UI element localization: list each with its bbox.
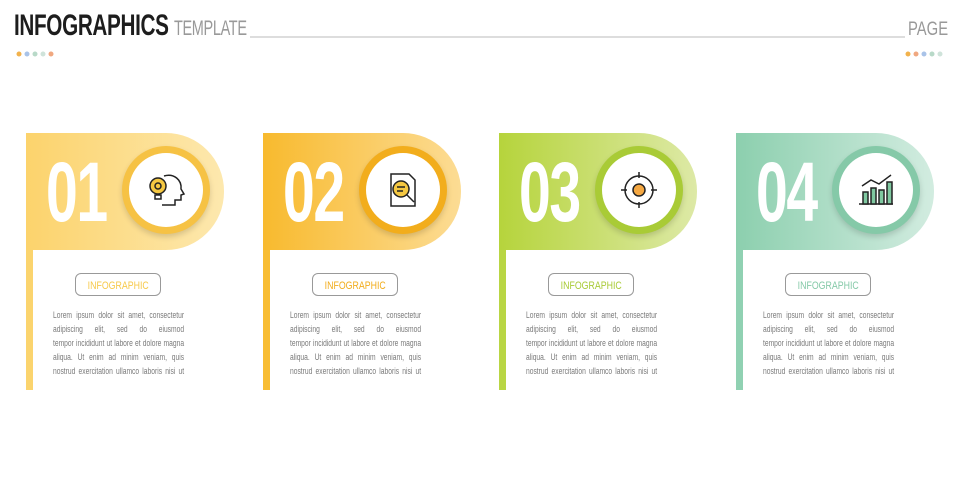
title: INFOGRAPHICS TEMPLATE: [14, 9, 247, 42]
dots left: [16, 52, 54, 56]
label button: [75, 273, 161, 296]
label button: INFOGRAPHIC: [560, 280, 622, 292]
text: aliqua. Ut enim ad minim veniam, quis: [290, 352, 421, 362]
text: nostrud exercitation ullamco laboris nisi ut: [763, 366, 894, 376]
text: tempor incididunt ut labore et dolore magna: [763, 338, 894, 348]
text: tempor incididunt ut labore et dolore magna: [53, 338, 184, 348]
text: adipiscing elit, sed do eiusmod: [290, 324, 421, 334]
label button: INFOGRAPHIC: [87, 280, 149, 292]
number 04: 04: [756, 145, 817, 239]
text: [526, 310, 658, 376]
text: nostrud exercitation ullamco laboris nisi ut: [526, 366, 657, 376]
number 01: 01: [46, 145, 107, 239]
icon: document search: [359, 146, 447, 234]
label button: INFOGRAPHIC: [797, 280, 859, 292]
label button: INFOGRAPHIC: [324, 280, 386, 292]
panel: 02: [263, 133, 461, 390]
text: [763, 310, 894, 376]
text: [53, 310, 184, 376]
text: [290, 310, 422, 376]
dots right: [906, 52, 942, 56]
icon: gear target: [595, 146, 683, 234]
panel: 01: [26, 133, 224, 390]
text: nostrud exercitation ullamco laboris nisi ut: [290, 366, 421, 376]
number 03: 03: [519, 145, 580, 239]
text: adipiscing elit, sed do eiusmod: [763, 324, 894, 334]
text: Lorem ipsum dolor sit amet, consectetur: [763, 310, 894, 320]
text: adipiscing elit, sed do eiusmod: [526, 324, 657, 334]
icon: bar chart: [832, 146, 920, 234]
text: aliqua. Ut enim ad minim veniam, quis: [526, 352, 657, 362]
panel: 04: [736, 133, 934, 390]
text: tempor incididunt ut labore et dolore magna: [526, 338, 657, 348]
text: Lorem ipsum dolor sit amet, consectetur: [53, 310, 184, 320]
page label: PAGE: [908, 19, 948, 40]
icon: lightbulb head: [122, 146, 210, 234]
header line: [250, 36, 905, 38]
label button: [548, 273, 634, 296]
text: nostrud exercitation ullamco laboris nisi ut: [53, 366, 184, 376]
text: aliqua. Ut enim ad minim veniam, quis: [763, 352, 894, 362]
label button: [785, 273, 871, 296]
panel: 03: [499, 133, 697, 390]
text: tempor incididunt ut labore et dolore magna: [290, 338, 421, 348]
text: Lorem ipsum dolor sit amet, consectetur: [290, 310, 421, 320]
text: aliqua. Ut enim ad minim veniam, quis: [53, 352, 184, 362]
text: adipiscing elit, sed do eiusmod: [53, 324, 184, 334]
number 02: 02: [283, 145, 344, 239]
text: Lorem ipsum dolor sit amet, consectetur: [526, 310, 657, 320]
label button: [312, 273, 398, 296]
